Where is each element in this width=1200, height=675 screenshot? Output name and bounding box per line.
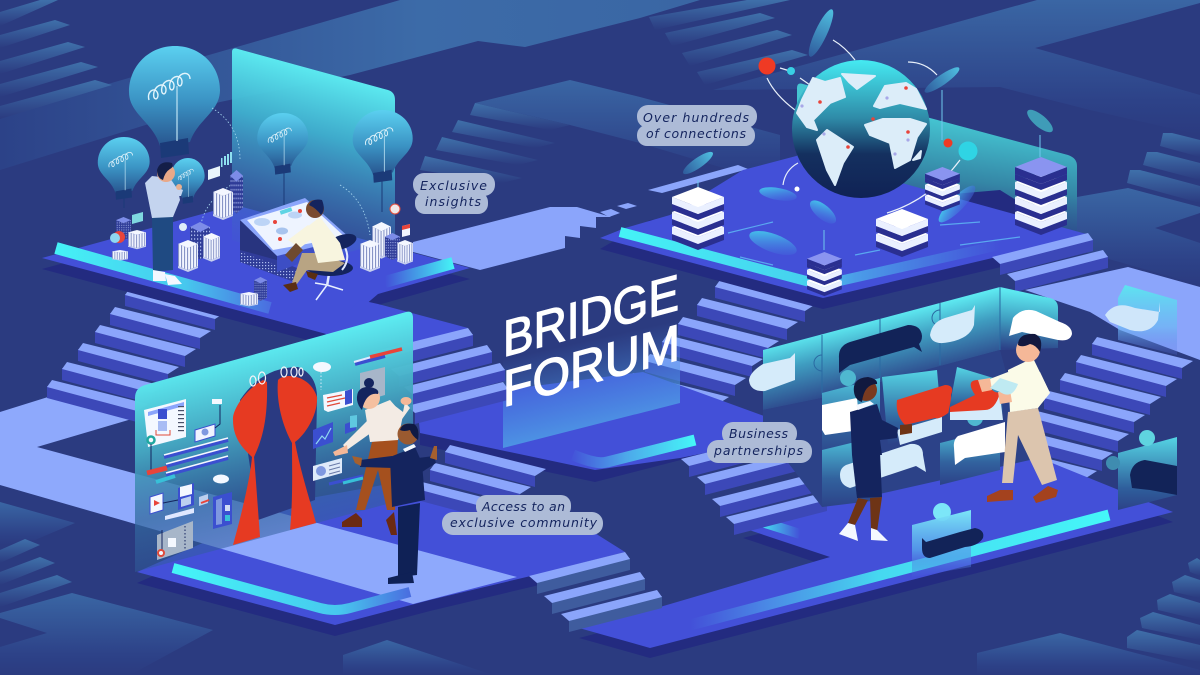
bubble: white top [1009, 310, 1072, 340]
logo: BRIDGE [503, 264, 679, 369]
stairs: top-left platform to centre [372, 328, 508, 424]
coins [680, 7, 1056, 260]
red curtain left [233, 380, 267, 545]
city buildings [112, 170, 413, 306]
label: over hundreds of connections [637, 105, 757, 146]
orbit nodes [758, 58, 978, 192]
mini icons around city [110, 152, 410, 243]
server stack left [672, 187, 724, 250]
orbit arcs [767, 40, 960, 213]
curtain rings [250, 367, 303, 386]
lilac dots [800, 96, 910, 156]
dotted arcs [200, 108, 370, 235]
platform: top-left [42, 205, 470, 346]
continents [797, 74, 926, 185]
puzzle piece held right [947, 367, 1003, 420]
server stack centre [876, 209, 928, 257]
stairs: top-left to left walkway [47, 288, 226, 422]
stairs: centre to lower-left floor [417, 445, 546, 524]
standing person with hoodie [145, 162, 183, 285]
glass panel under logo [503, 303, 680, 448]
label: business partnerships [707, 422, 812, 463]
server stack front [807, 252, 842, 296]
bulb behind person [171, 158, 205, 204]
cyan edge left: top-left platform [56, 248, 270, 308]
desk with map table [240, 198, 350, 283]
bulb in glass centre [257, 113, 308, 205]
stairs: back of top-right platform [600, 165, 748, 217]
puzzle wall [763, 287, 1058, 507]
logo: FORUM [503, 314, 680, 419]
label: over hundreds of connections: of connections [646, 126, 746, 141]
label: exclusive insights: Exclusive [420, 178, 487, 193]
panel icons right [313, 349, 402, 484]
server stack back [925, 167, 960, 211]
cyan edge: top-right platform [620, 232, 1000, 284]
stairs: lower-left floor to lower-right floor [529, 552, 662, 632]
cyan stub: lower-right floor [762, 522, 800, 534]
cyan edge: lower-left floor [173, 568, 410, 610]
glass panel: top-right [797, 84, 1077, 240]
platform: centre [418, 372, 790, 482]
upper staircases [600, 165, 1193, 489]
bulb large [129, 46, 220, 158]
cyan edge right: top-left platform [385, 263, 453, 282]
logo [503, 264, 680, 419]
man in navy suit [352, 424, 437, 584]
bubble: white centre [954, 422, 1005, 465]
server stack right [1015, 157, 1067, 235]
curtain doorway [240, 367, 317, 520]
woman in cream blouse [333, 378, 412, 535]
red curtain right [278, 376, 317, 530]
platform: lower-right floor [579, 450, 1173, 658]
platform detail lines [728, 222, 1020, 265]
bulb left [98, 137, 150, 208]
bubble: light right [930, 305, 975, 343]
glass panel: top-left [232, 48, 395, 265]
coin stems [698, 90, 1040, 250]
light walkway: left [0, 397, 517, 604]
label: access to an exclusive community: Access to an [481, 499, 565, 514]
cyan edge: lower-right floor [690, 515, 1109, 625]
label: access to an exclusive community [442, 495, 603, 535]
businesswoman [839, 377, 912, 541]
stairs: top-right to right walkway [992, 233, 1108, 292]
city dots [818, 86, 910, 149]
bubble: dark [839, 325, 922, 373]
bubble: light left [749, 353, 795, 391]
platform: lower-left floor [137, 480, 625, 636]
puzzle piece held left [882, 370, 952, 445]
businessman [978, 334, 1058, 503]
label: over hundreds of connections: Over hundreds [643, 110, 749, 125]
bulb in glass right [353, 110, 413, 212]
light walkway behind top-left platform [413, 207, 611, 270]
label: exclusive insights [413, 173, 495, 214]
cyan edge: centre platform [573, 440, 695, 463]
stairs: right side [996, 337, 1193, 489]
puzzle piece bottom right [1106, 430, 1177, 510]
label: access to an exclusive community: exclusive community [450, 515, 598, 530]
label: exclusive insights: insights [425, 194, 481, 209]
bubble: pale centre [840, 444, 926, 488]
panel icons left [144, 399, 232, 560]
bubble: white left [822, 398, 860, 435]
stairs: centre to top-right [628, 280, 816, 415]
stairs: centre to lower-right floor [681, 435, 827, 535]
label: business partnerships: Business [729, 426, 788, 441]
glass panel: mid-left [135, 312, 413, 572]
label: business partnerships: partnerships [713, 443, 803, 458]
light walkway right side [1025, 267, 1200, 360]
globe [792, 60, 930, 198]
platform: top-right [600, 155, 1090, 309]
light puzzle with bubble top right [1105, 285, 1177, 355]
puzzle piece on floor [912, 503, 983, 577]
seated man [278, 200, 358, 300]
